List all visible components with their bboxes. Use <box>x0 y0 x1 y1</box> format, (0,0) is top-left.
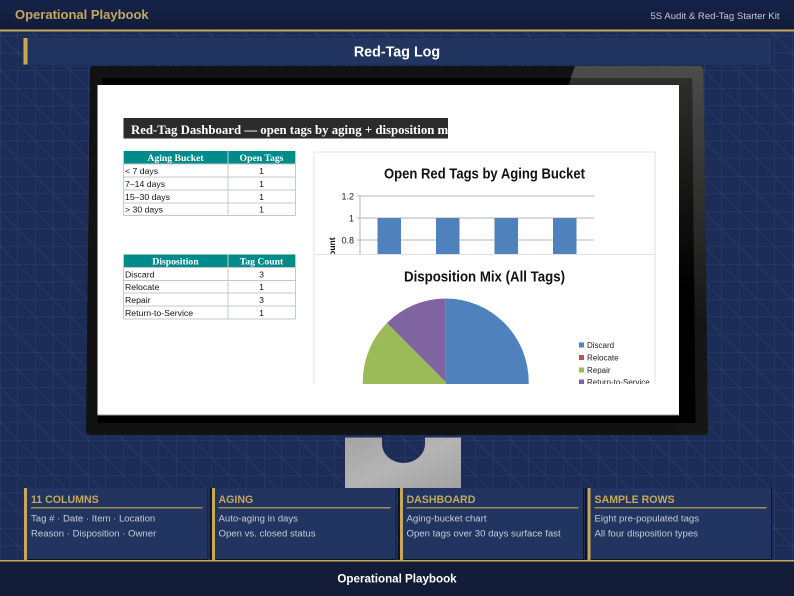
card: dashboard: Aging-bucket chart <box>406 514 487 524</box>
disposition table: Discard <box>125 270 155 280</box>
card: aging <box>210 488 396 560</box>
card: 11 columns <box>24 488 208 560</box>
brand name: Operational Playbook <box>15 7 149 22</box>
footer text: Operational Playbook <box>337 572 457 586</box>
sheet title <box>124 118 459 138</box>
monitor <box>86 66 708 466</box>
legend: Repair <box>587 366 611 375</box>
card: dashboard: Open tags over 30 days surface fast <box>406 528 561 540</box>
aging table: 1 <box>259 192 264 202</box>
aging table: > 30 days <box>125 204 164 214</box>
sheet title: Red-Tag Dashboard — open tags by aging + disposition mix <box>131 123 459 137</box>
disposition table: Tag Count <box>240 256 284 268</box>
bar chart: open red tags by aging bucket: 0.8 <box>341 236 354 246</box>
footer bar <box>0 560 794 596</box>
aging table: 1 <box>259 179 264 189</box>
bar chart: open red tags by aging bucket: 1 <box>349 214 354 224</box>
disposition table: 1 <box>259 282 264 292</box>
card: aging: Open vs. closed status <box>218 528 316 540</box>
aging table: 7–14 days <box>125 179 166 189</box>
aging table: < 7 days <box>125 166 159 176</box>
disposition table: Relocate <box>125 282 159 292</box>
card: 11 columns: Reason · Disposition · Owner <box>31 528 157 540</box>
card: 11 columns: 11 COLUMNS <box>31 494 99 506</box>
legend <box>579 341 650 387</box>
legend: Relocate <box>587 354 619 362</box>
header bar <box>0 0 794 32</box>
disposition table: 1 <box>259 308 264 318</box>
legend: Return-to-Service <box>587 378 650 387</box>
disposition table: Disposition <box>152 256 199 268</box>
bar chart: open red tags by aging bucket <box>314 152 655 262</box>
kit name: 5S Audit & Red-Tag Starter Kit <box>650 11 780 22</box>
pie chart: disposition mix <box>314 254 656 384</box>
pie chart: disposition mix: Disposition Mix (All Tags) <box>404 268 565 286</box>
disposition table: Return-to-Service <box>125 308 193 318</box>
aging table: Aging Bucket <box>147 153 204 164</box>
aging table: 1 <box>259 166 264 176</box>
card: aging: Auto-aging in days <box>218 514 298 524</box>
monitor stand <box>345 438 461 488</box>
screen <box>98 85 679 415</box>
aging table: 15–30 days <box>125 192 171 202</box>
disposition table <box>124 254 296 319</box>
bar chart: open red tags by aging bucket: Open Red Tags by Aging Bucket <box>384 166 585 182</box>
card: dashboard: DASHBOARD <box>406 494 476 506</box>
card: sample rows: SAMPLE ROWS <box>594 494 675 506</box>
card: aging: AGING <box>218 494 253 506</box>
card: dashboard <box>398 488 584 560</box>
aging table: Open Tags <box>240 153 284 164</box>
card: 11 columns: Tag # · Date · Item · Location <box>31 514 155 524</box>
disposition table: 3 <box>259 295 264 305</box>
card: sample rows <box>585 488 772 560</box>
bar chart: open red tags by aging bucket: Count <box>327 237 337 262</box>
section title band <box>23 38 771 64</box>
legend: Discard <box>587 341 614 350</box>
disposition table: Repair <box>125 295 151 305</box>
card: sample rows: All four disposition types <box>594 528 698 540</box>
card: sample rows: Eight pre-populated tags <box>594 514 699 524</box>
section title: Red-Tag Log <box>354 44 440 60</box>
bezel <box>86 66 708 435</box>
disposition table: 3 <box>259 270 264 280</box>
aging table: 1 <box>259 204 264 214</box>
bar chart: open red tags by aging bucket: 1.2 <box>341 192 354 202</box>
aging table <box>124 151 296 216</box>
